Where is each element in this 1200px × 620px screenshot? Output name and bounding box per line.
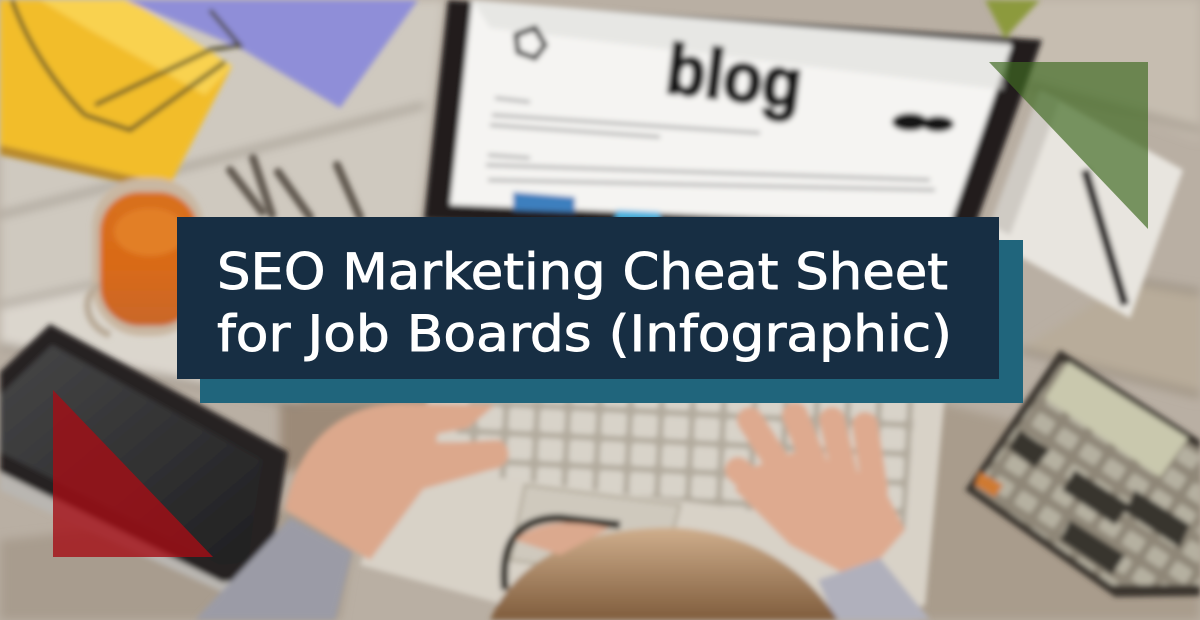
decorative green triangle [989, 62, 1148, 229]
screen text lines [486, 98, 935, 190]
right hand [735, 415, 905, 582]
keyboard and laptop base [360, 395, 945, 620]
plant [985, 0, 1040, 38]
title line 2: for Job Boards (Infographic) [217, 305, 952, 363]
decorative red triangle [53, 390, 213, 557]
purple paper [125, 0, 418, 108]
tea glass [92, 178, 204, 336]
calculator [965, 350, 1200, 597]
title [217, 243, 952, 363]
tablet [0, 324, 288, 582]
shirt sleeves [195, 518, 352, 620]
eyeglasses [12, 0, 242, 130]
blog word: blog [662, 29, 807, 123]
title line 1: SEO Marketing Cheat Sheet [217, 243, 948, 301]
laptop screen [424, 0, 1042, 240]
title panel: navy [177, 217, 999, 379]
left hand [285, 403, 509, 560]
pens on desk [230, 158, 360, 217]
head [490, 528, 838, 620]
title back panel: teal offset [200, 240, 1023, 403]
yellow folder [0, 0, 232, 185]
notebook [990, 90, 1183, 318]
